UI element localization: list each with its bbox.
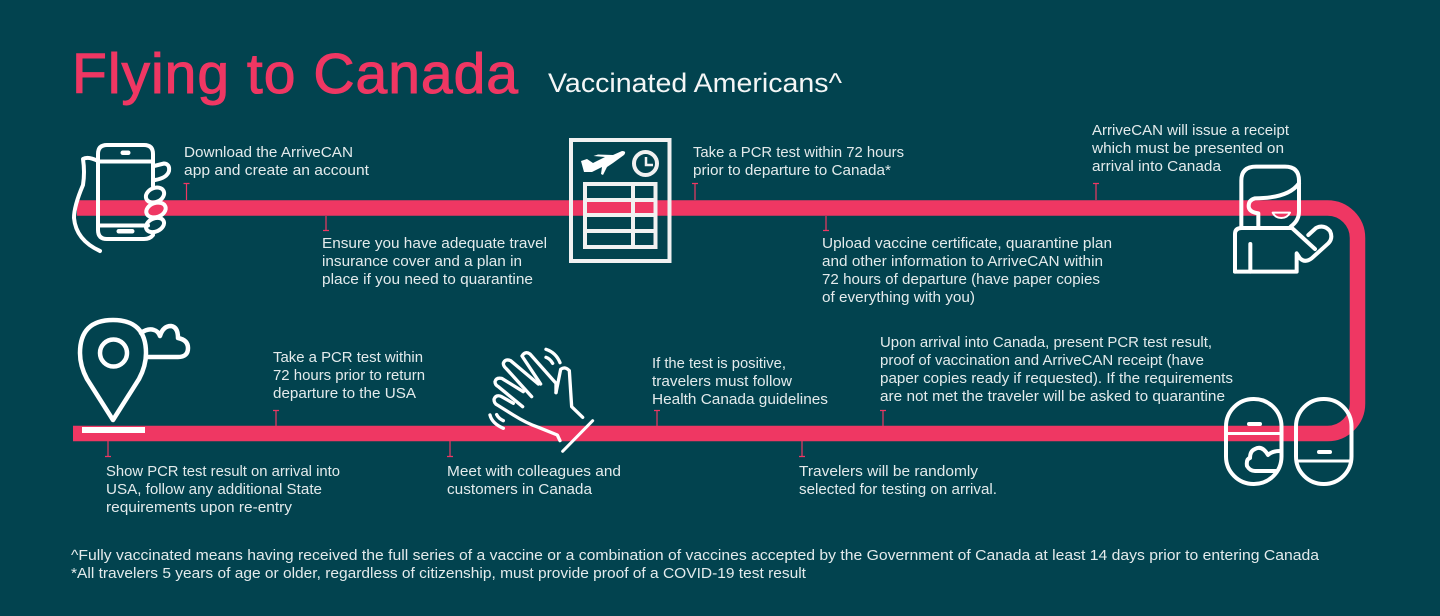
icon: masked officer xyxy=(1235,167,1331,272)
icon: plane xyxy=(581,151,625,175)
text: insurance: Ensure you have adequate travel xyxy=(322,235,547,252)
text: random testing xyxy=(799,463,997,498)
text: receipt: which must be presented on xyxy=(1091,140,1284,157)
text: return test xyxy=(273,349,425,402)
text: random testing: Travelers will be randomly xyxy=(799,463,979,480)
text: insurance: place if you need to quarantine xyxy=(322,271,533,288)
text: upon arrival: proof of vaccination and ArriveCAN receipt (have xyxy=(880,352,1204,369)
text: receipt: arrival into Canada xyxy=(1092,158,1222,175)
text: upload: 72 hours of departure (have paper copies xyxy=(822,271,1100,288)
text: insurance: insurance cover and a plan in xyxy=(322,253,522,270)
text: PCR test xyxy=(693,144,904,179)
footnotes xyxy=(71,547,1320,582)
subtitle: Vaccinated Americans^ xyxy=(548,68,842,98)
text: return test: Take a PCR test within xyxy=(273,349,423,366)
tick markers xyxy=(105,183,1099,457)
icon: waving hand xyxy=(490,349,593,451)
text: positive test xyxy=(652,355,828,408)
text: return test: departure to the USA xyxy=(273,385,416,402)
text: upload: Upload vaccine certificate, quarantine plan xyxy=(822,235,1112,252)
text: receipt xyxy=(1091,122,1290,175)
text: PCR test: Take a PCR test within 72 hours xyxy=(693,144,904,161)
text: PCR test: prior to departure to Canada* xyxy=(693,162,891,179)
text: upon arrival: are not met the traveler will be asked to quarantine xyxy=(880,388,1225,405)
icon: white underline xyxy=(82,427,145,433)
text: upon arrival: Upon arrival into Canada, present PCR test result, xyxy=(880,334,1212,351)
text: upload: and other information to ArriveCAN within xyxy=(822,253,1103,270)
text: upon arrival xyxy=(880,334,1233,405)
text: show PCR result: Show PCR test result on arrival into xyxy=(106,463,340,480)
icon: map pin with cloud xyxy=(80,320,188,420)
text: positive test: If the test is positive, xyxy=(652,355,786,372)
text: return test: 72 hours prior to return xyxy=(273,367,425,384)
text: show PCR result: USA, follow any additional State xyxy=(106,481,322,498)
text: receipt: ArriveCAN will issue a receipt xyxy=(1092,122,1290,139)
title: Flying to Canada xyxy=(72,42,518,106)
text: meet colleagues xyxy=(447,463,621,498)
text: upon arrival: paper copies ready if requested). If the requirements xyxy=(880,370,1233,387)
text: download app: Download the ArriveCAN xyxy=(184,144,353,161)
text: random testing: selected for testing on arrival. xyxy=(799,481,997,498)
icon: phone in hand xyxy=(74,145,169,251)
text: positive test: Health Canada guidelines xyxy=(652,391,828,408)
text: positive test: travelers must follow xyxy=(652,373,792,390)
text: meet colleagues: customers in Canada xyxy=(447,481,593,498)
icon: airplane windows xyxy=(1226,399,1352,484)
text: upload xyxy=(822,235,1112,306)
text: download app xyxy=(184,144,370,179)
icon: flight schedule document xyxy=(571,140,670,261)
text: show PCR result xyxy=(106,463,340,516)
footnotes: *All travelers 5 years of age or older, regardless of citizenship, must provide proof of a COVID-19 test result xyxy=(71,565,807,582)
text: upload: of everything with you) xyxy=(822,289,975,306)
text: meet colleagues: Meet with colleagues and xyxy=(447,463,621,480)
text: download app: app and create an account xyxy=(184,162,370,179)
footnotes: ^Fully vaccinated means having received the full series of a vaccine or a combination of vaccines accepted by the Government of Canada at least 14 days prior to entering Canada xyxy=(71,547,1320,564)
text: insurance xyxy=(322,235,547,288)
text: show PCR result: requirements upon re-entry xyxy=(106,499,292,516)
timeline track xyxy=(73,208,1358,434)
